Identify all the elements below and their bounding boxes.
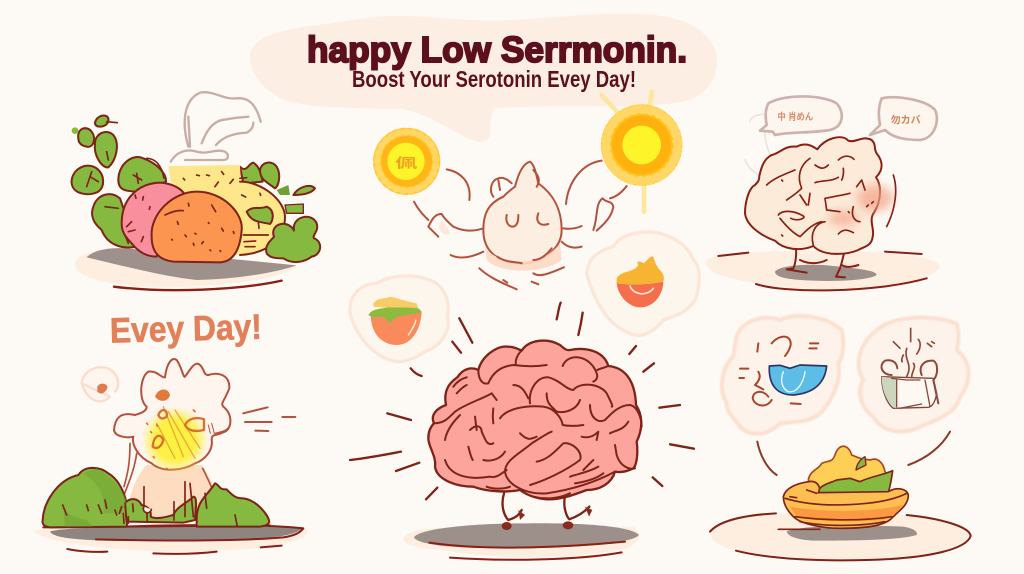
title: happy Low Serrmonin. [307,29,687,70]
ground [33,525,308,554]
mascot arms [414,161,627,289]
orange fruit [152,192,242,262]
right sun [602,92,678,212]
salad bowl [371,312,422,345]
every day heading: Evey Day! [109,308,262,351]
brain legs [787,248,858,277]
panel: every day message with glowing figure [33,308,308,554]
right thought bubble [859,318,968,431]
brain legs [503,493,589,520]
steam [171,92,261,162]
right food thought bubble [587,232,699,335]
ground shadow [403,527,639,557]
feet [502,507,592,530]
panel: meditating mascot with suns [377,92,678,289]
pink fruit [122,183,185,257]
green bushes [42,468,269,527]
sun glyph: 佩 [395,155,418,170]
green bush [266,217,320,262]
mini thought bubble [82,367,118,401]
plate [75,248,297,287]
bubble text: 勿カバ [891,113,921,126]
brain folds [433,351,642,498]
speech bubble left [745,96,842,175]
brain creases [767,156,896,245]
panel: central thought bubbles [350,232,699,362]
food bowl [778,446,908,529]
plate [710,513,971,560]
yellow fruit [168,165,285,255]
blue bowl [769,365,827,395]
title speech bubble [250,14,717,142]
left thought bubble [722,316,843,434]
steaming pot icon [882,377,937,408]
brain body [745,137,882,254]
ground lines [429,542,625,560]
brain motion lines [350,303,694,499]
ground shadow [775,265,877,281]
bowl shadow [787,526,917,541]
blush [857,185,893,212]
subtitle: Boost Your Serotonin Evey Day! [352,66,636,92]
panel: bowl with thought bubbles [710,316,971,560]
ground lines [718,252,927,290]
plate shadow [87,248,297,280]
connector lines [757,432,950,475]
panel: central happy brain [350,303,694,560]
leaves [72,115,315,248]
plate rim line [114,281,282,290]
motion lines [243,407,295,431]
ground disc [706,251,940,289]
left food thought bubble [350,276,448,362]
orange bowl [617,282,663,307]
left sun [377,132,436,191]
brain outline [428,341,641,499]
speech bubble right [870,97,937,140]
figure head glow [114,359,230,470]
mascot body [483,162,562,263]
figure body [130,465,217,520]
panel: brain with speech bubbles [706,96,940,290]
bubble text: 中 肖めん [777,111,814,123]
panel: healthy food plate [72,92,320,290]
